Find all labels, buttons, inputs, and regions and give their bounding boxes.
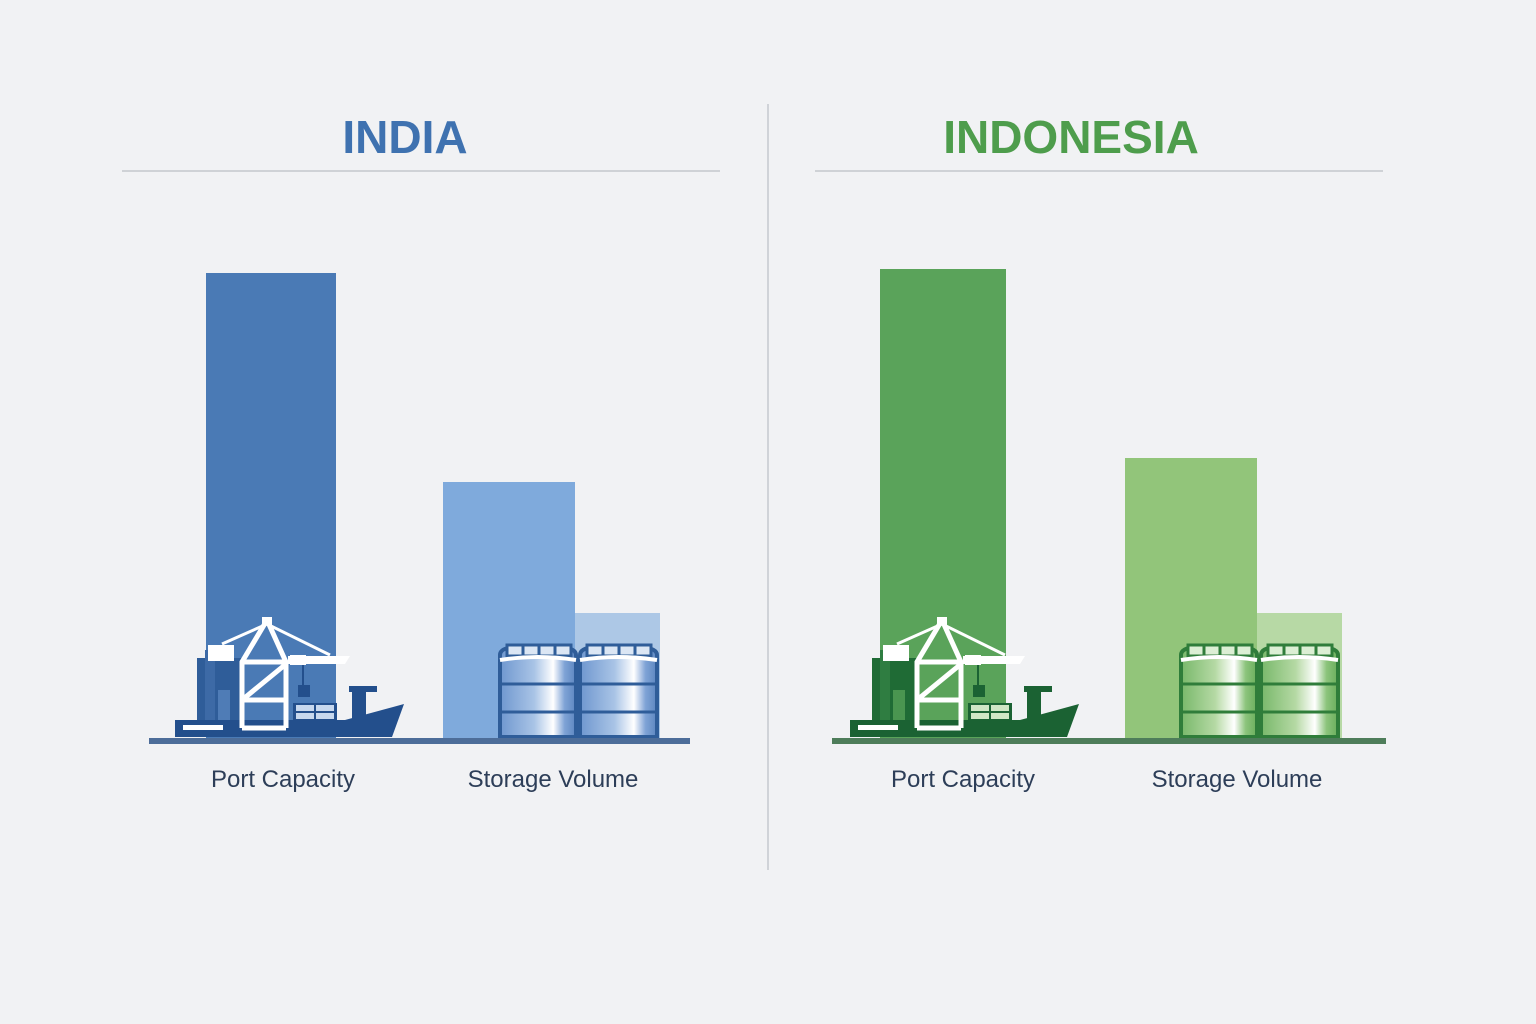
- panel: India: [122, 111, 720, 793]
- label: port capacity: Port Capacity: [211, 766, 355, 793]
- baseline: [832, 738, 1386, 744]
- bar: storage volume: [443, 482, 575, 739]
- bar: storage volume: [1125, 458, 1257, 739]
- label: port capacity: Port Capacity: [891, 766, 1035, 793]
- panel: Indonesia: [815, 111, 1386, 793]
- title: INDIA: INDIA: [342, 111, 468, 163]
- bar: storage volume secondary: [575, 613, 660, 739]
- divider: [767, 104, 769, 870]
- icon: storage tanks: [1181, 645, 1338, 737]
- icon: storage tanks: [500, 645, 657, 737]
- bar: port capacity: [880, 269, 1006, 739]
- title: INDONESIA: INDONESIA: [943, 111, 1199, 163]
- bar: port capacity: [206, 273, 336, 739]
- icon: port crane and ship: [175, 617, 404, 737]
- baseline: [149, 738, 690, 744]
- bar: storage volume secondary: [1257, 613, 1342, 739]
- label: storage volume: Storage Volume: [468, 766, 638, 793]
- label: storage volume: Storage Volume: [1152, 766, 1322, 793]
- icon: port crane and ship: [850, 617, 1079, 737]
